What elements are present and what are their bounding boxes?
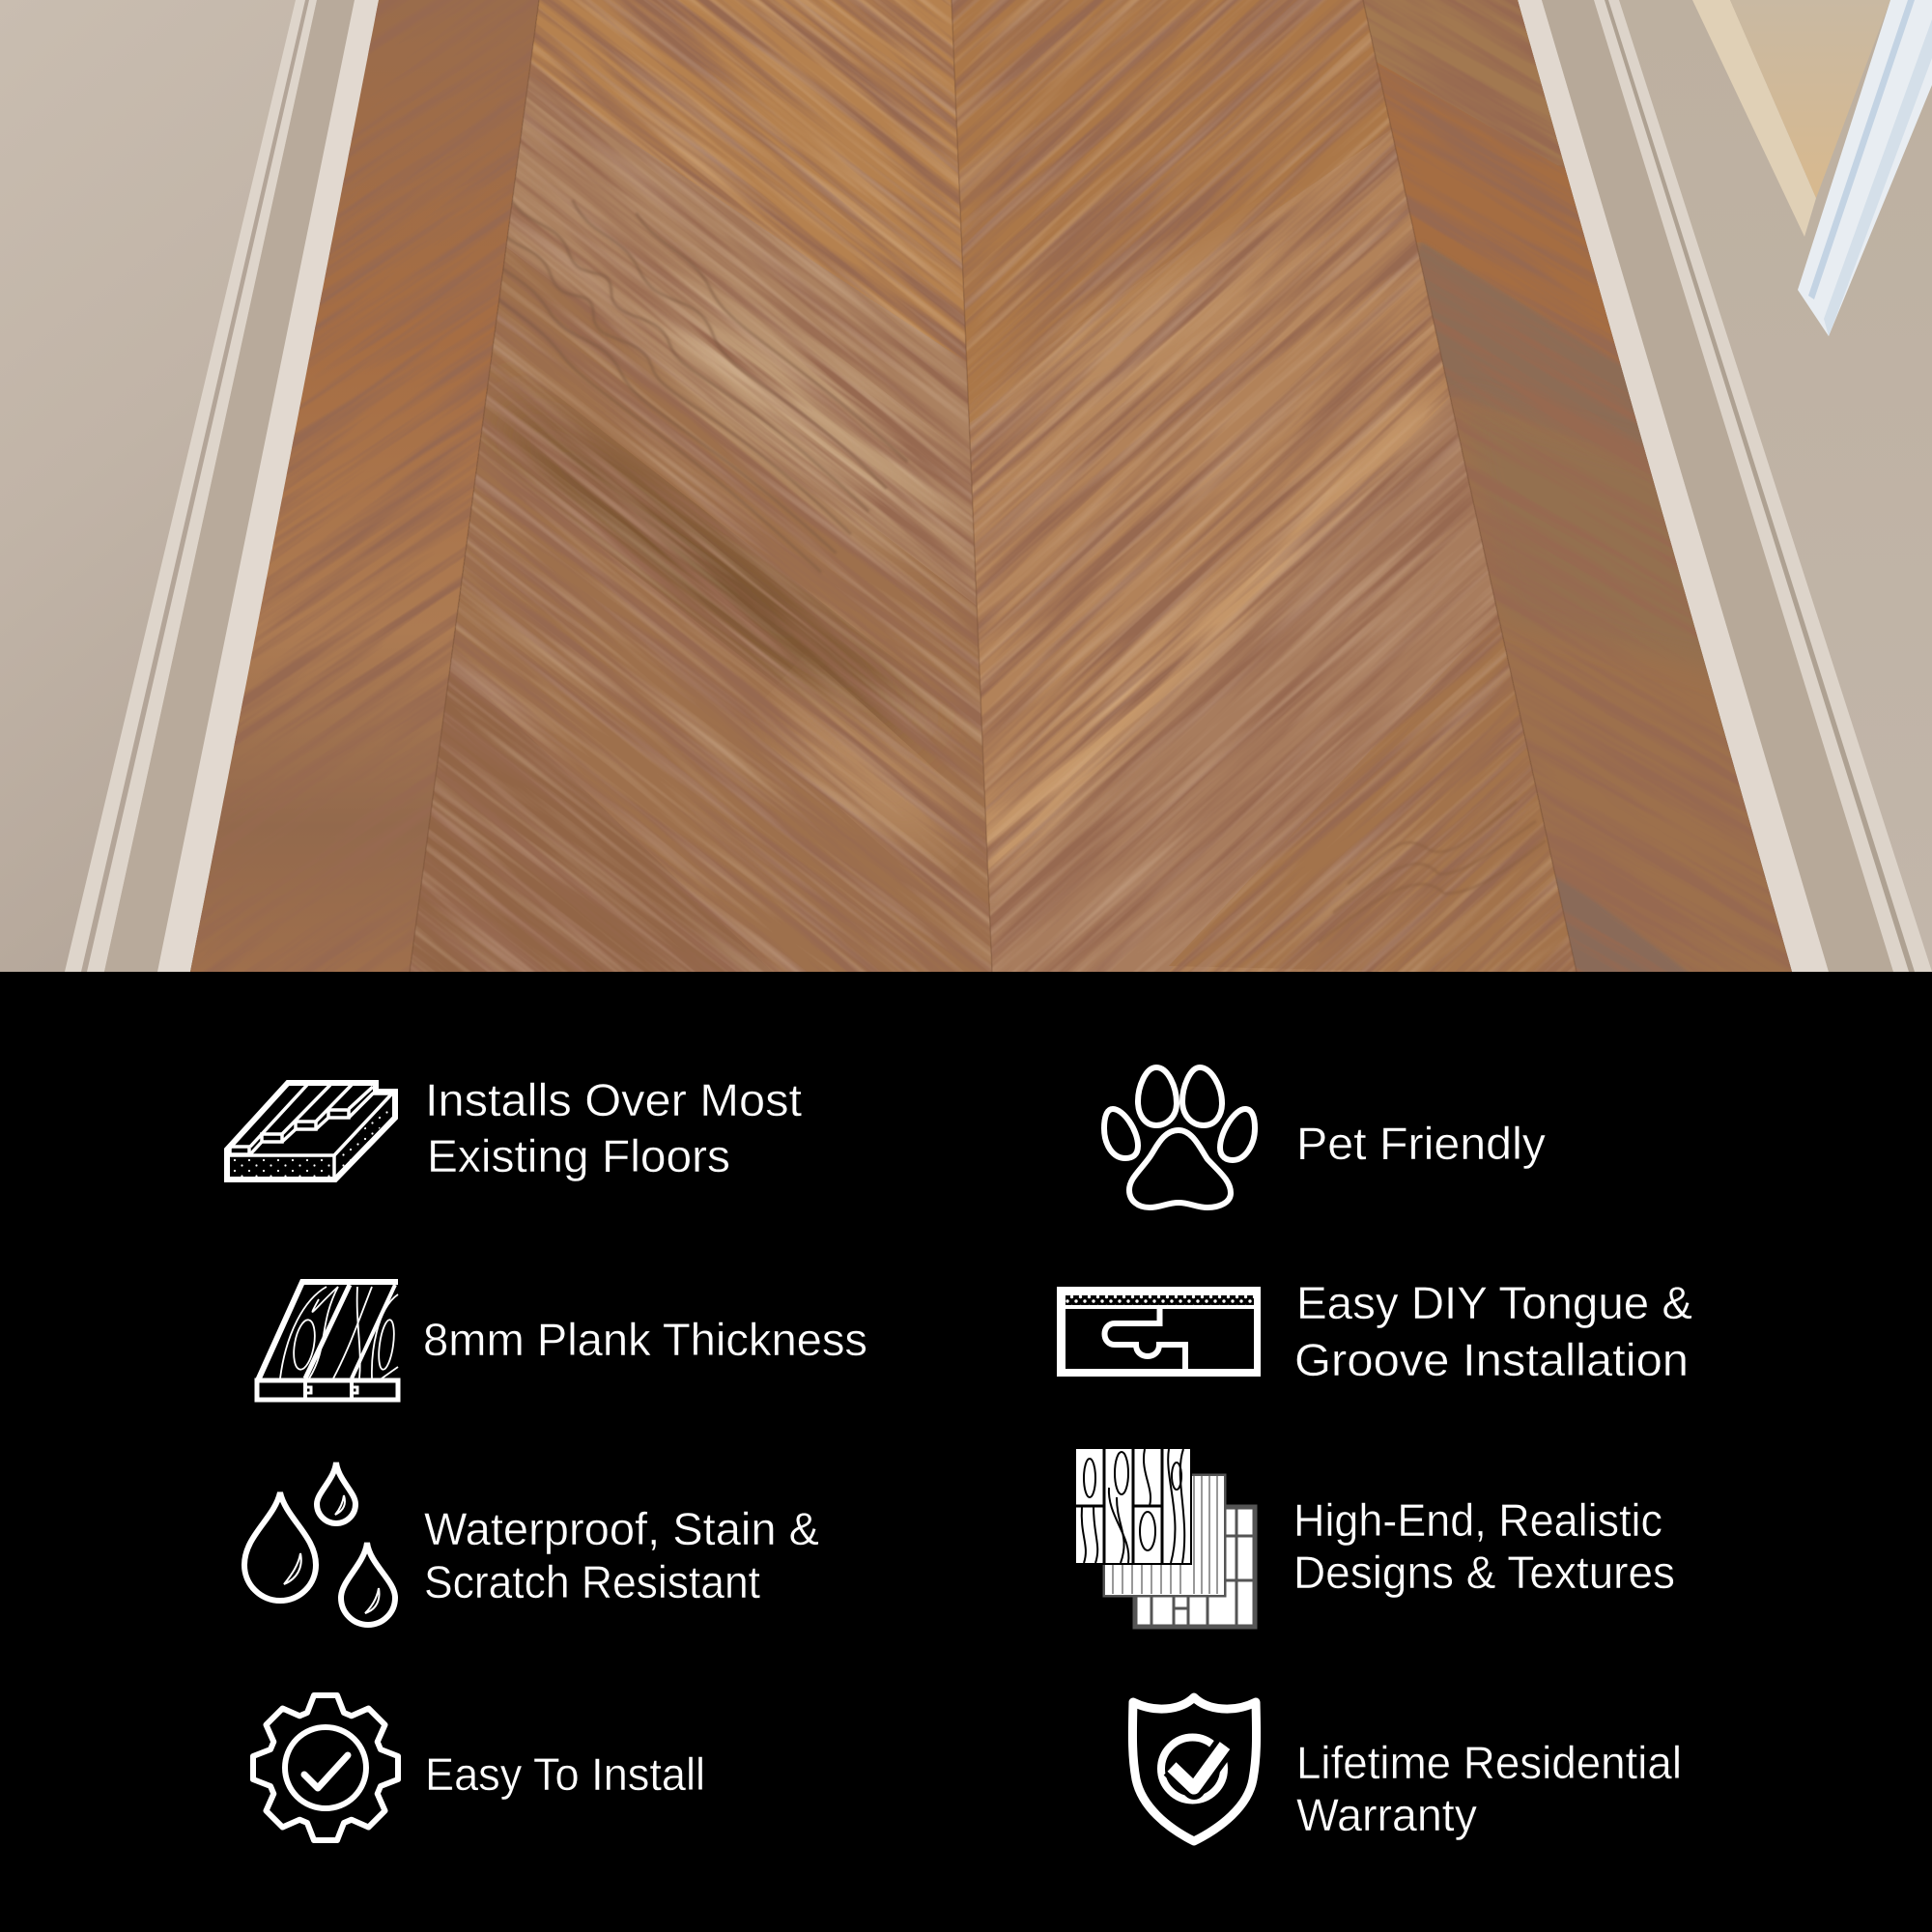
- floor seams: [410, 0, 1577, 972]
- icon: water drops: [244, 1463, 395, 1625]
- text: easy DIY tongue and groove installation: Easy DIY Tongue &: [1296, 1277, 1692, 1328]
- feature: waterproof, stain and scratch resistant: [244, 1463, 819, 1625]
- text: high-end realistic designs and textures: High-End, Realistic: [1293, 1494, 1662, 1546]
- icon: stacked texture samples: [1074, 1447, 1255, 1627]
- text: lifetime residential warranty: [1296, 1737, 1682, 1840]
- icon: paw print: [1104, 1067, 1255, 1208]
- text: easy to install: Easy To Install: [425, 1748, 705, 1800]
- wood knot figure: [1319, 802, 1546, 942]
- right skirting board: [1518, 0, 1932, 972]
- text: pet friendly: Pet Friendly: [1296, 1118, 1546, 1169]
- text: installs over most existing floors: Existing Floors: [427, 1130, 730, 1181]
- left wall: [0, 0, 379, 972]
- icon: shield with check mark: [1132, 1697, 1257, 1841]
- text: 8mm plank thickness: 8mm Plank Thickness: [423, 1314, 867, 1365]
- doorway opening: [1692, 0, 1932, 336]
- feature: easy DIY tongue and groove installation: [1057, 1277, 1692, 1385]
- right wall: [1518, 0, 1932, 972]
- panel: feature list: [227, 1067, 1692, 1841]
- icon: layered floor slab: [227, 1083, 395, 1179]
- feature: lifetime residential warranty: [1132, 1697, 1682, 1841]
- text: high-end realistic designs and textures: Designs & Textures: [1293, 1547, 1675, 1598]
- text: waterproof, stain and scratch resistant: Scratch Resistant: [424, 1556, 760, 1607]
- text: easy DIY tongue and groove installation: [1294, 1277, 1692, 1385]
- text: waterproof, stain and scratch resistant: Waterproof, Stain &: [424, 1503, 819, 1554]
- icon: tongue and groove joint: [1057, 1287, 1261, 1377]
- text: high-end realistic designs and textures: [1293, 1494, 1675, 1598]
- feature: high-end realistic designs and textures: [1074, 1447, 1675, 1627]
- wood knot figure: [499, 199, 908, 572]
- text: lifetime residential warranty: Lifetime Residential: [1296, 1737, 1682, 1788]
- text: lifetime residential warranty: Warranty: [1296, 1789, 1477, 1840]
- grain detail: [305, 1387, 357, 1393]
- feature: 8mm plank thickness: [257, 1282, 867, 1400]
- floor column 0: [190, 0, 539, 972]
- feature: installs over most existing floors: [227, 1074, 802, 1181]
- floor column 3: [1363, 0, 1792, 972]
- icon: gear with check mark: [253, 1695, 398, 1840]
- floor column 1: [410, 0, 992, 972]
- left skirting board: [65, 0, 381, 972]
- text: installs over most existing floors: [425, 1074, 802, 1181]
- feature: pet friendly: [1104, 1067, 1546, 1208]
- text: waterproof, stain and scratch resistant: [424, 1503, 819, 1607]
- photo: chevron wood floor in hallway: [0, 0, 1932, 972]
- floor column 2: [952, 0, 1577, 972]
- text: installs over most existing floors: Installs Over Most: [425, 1074, 802, 1125]
- icon: wood plank section: [257, 1282, 398, 1400]
- feature: easy to install: [253, 1695, 705, 1840]
- text: easy DIY tongue and groove installation: Groove Installation: [1294, 1334, 1689, 1385]
